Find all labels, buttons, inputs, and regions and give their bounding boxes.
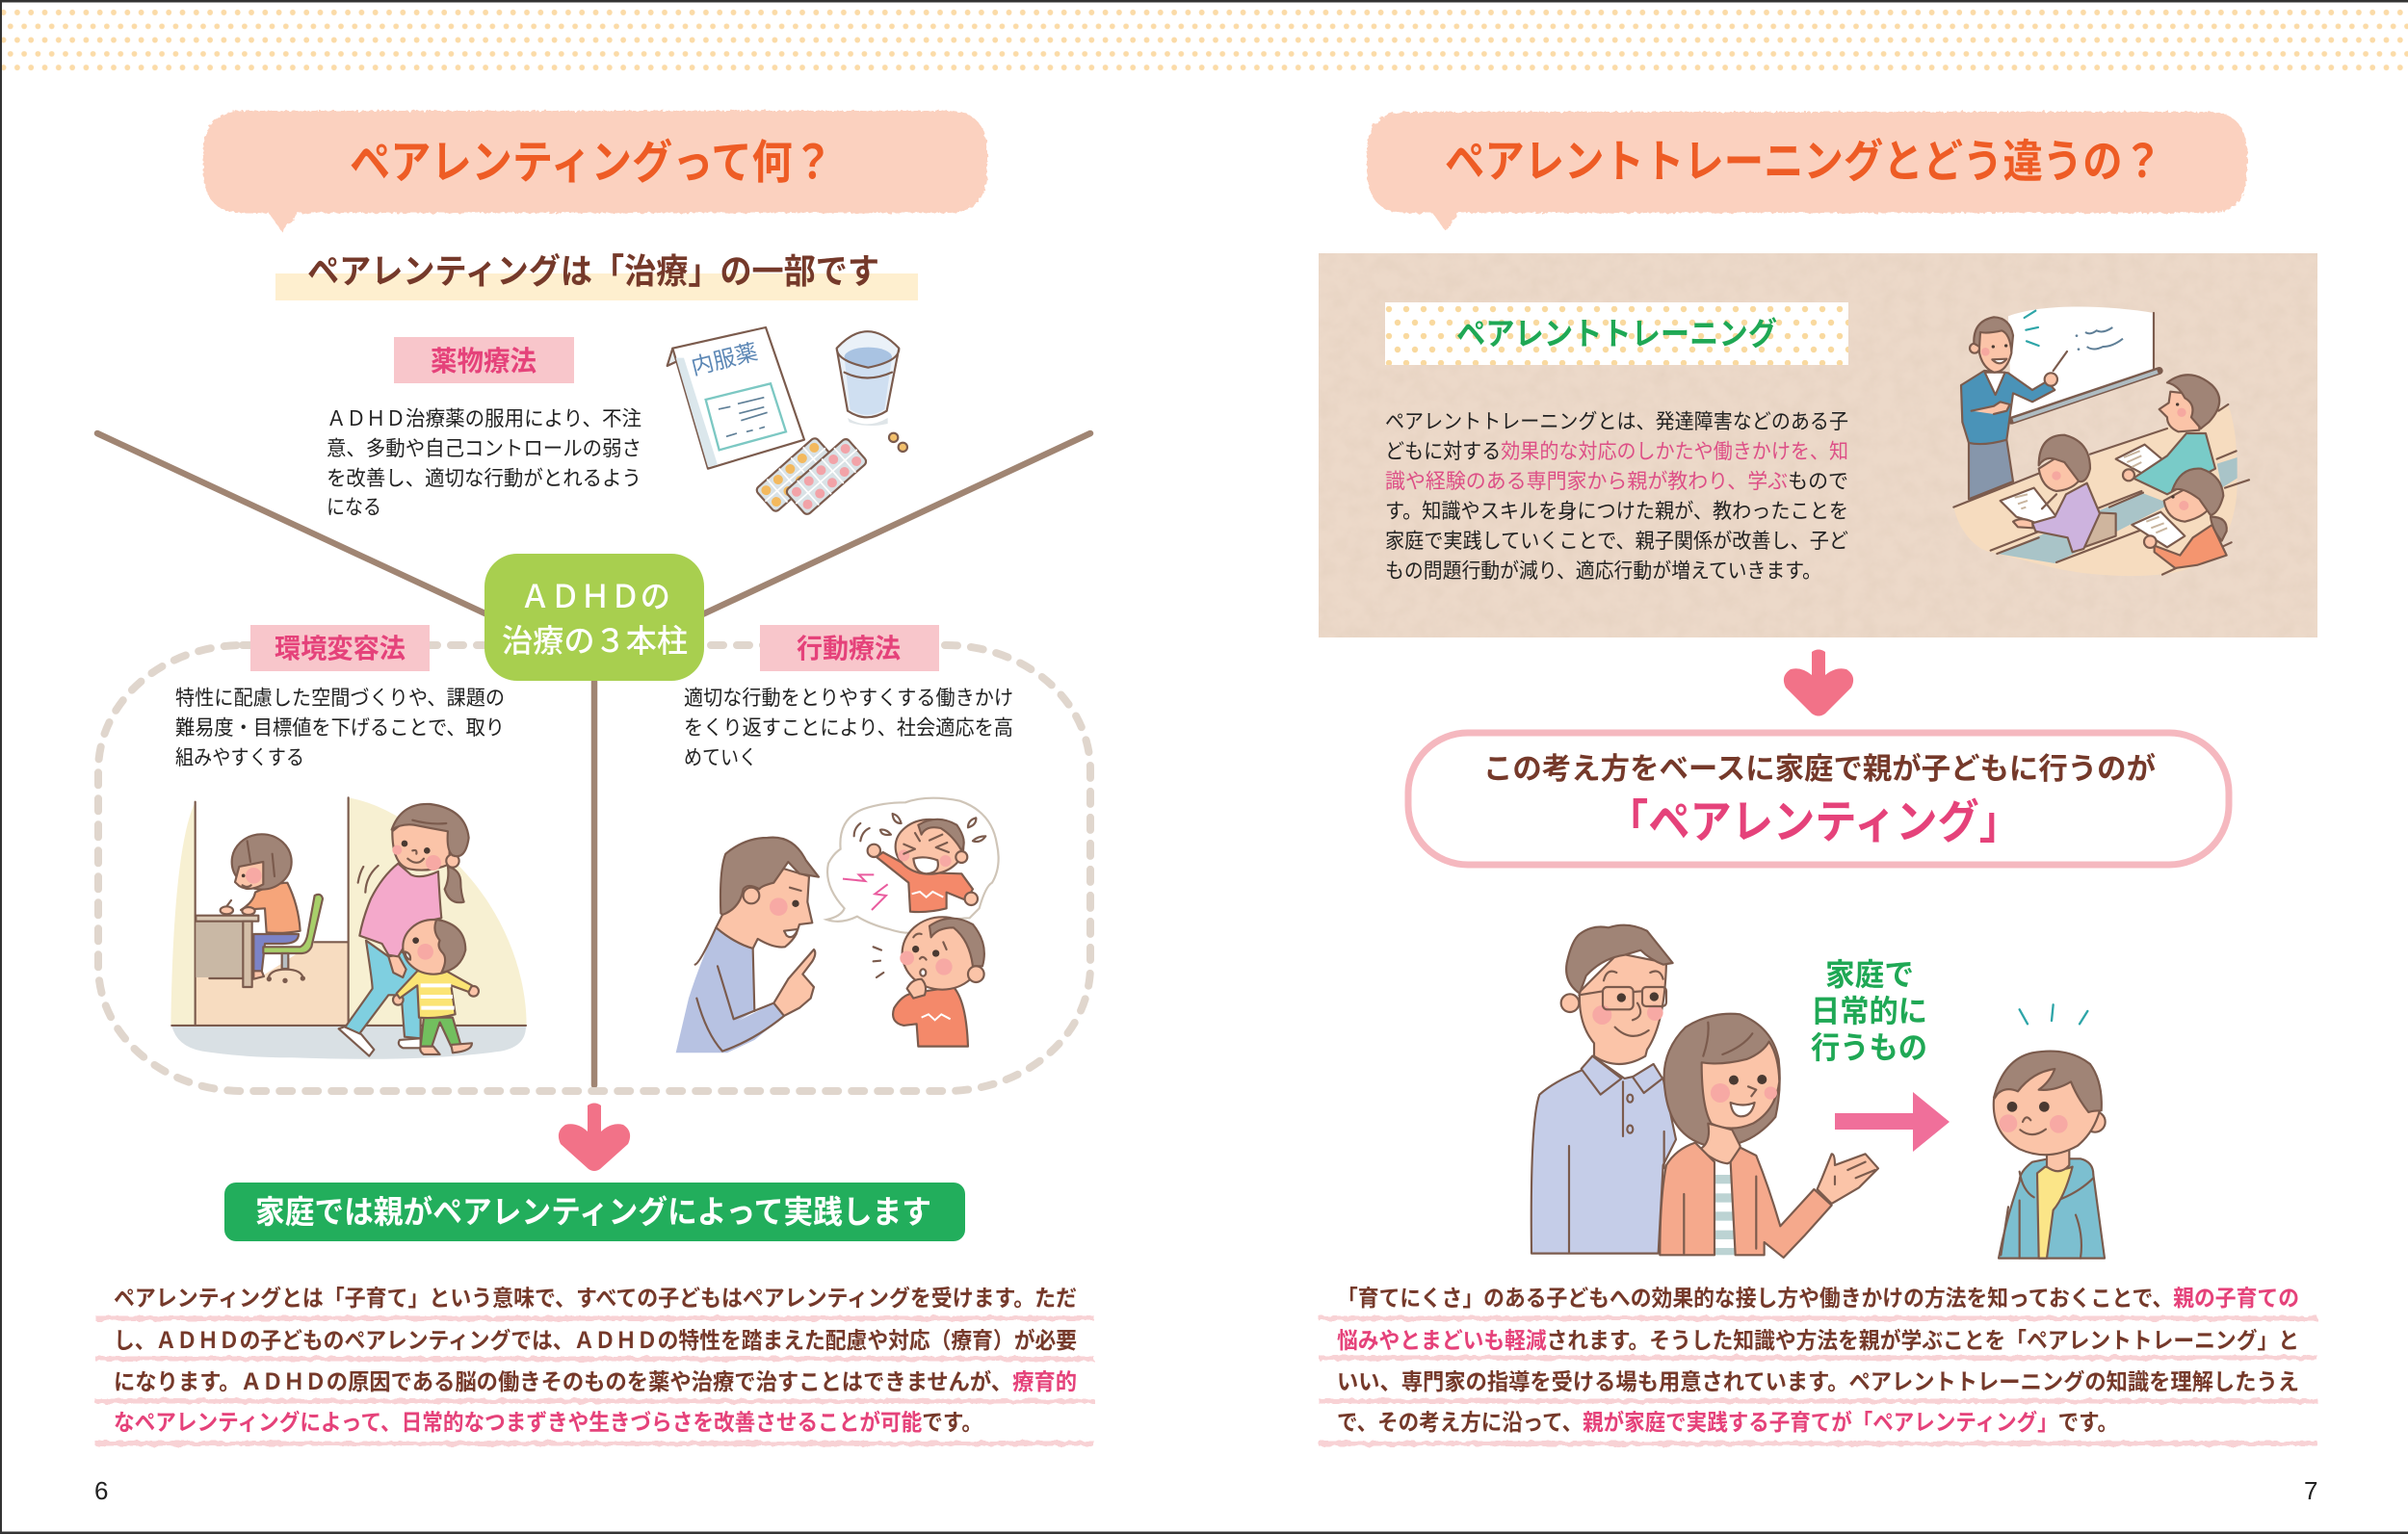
page number 6: 6 (94, 1476, 108, 1505)
illustration: child (1994, 1004, 2106, 1259)
icon: medicine bag, glass and pills: 内服薬 (689, 339, 760, 379)
paragraph: right page: いい、専門家の指導を受ける場も用意されています。ペアレントトレーニングの知識を理解したうえ (1337, 1368, 2299, 1394)
page number 7: 7 (2304, 1476, 2317, 1505)
text: behavior therapy: めていく (684, 746, 757, 769)
parent training text: す。知識やスキルを身につけた親が、教わったことを (1385, 500, 1848, 523)
paragraph: right page (1319, 1286, 2317, 1443)
illustration: classroom (1953, 307, 2249, 576)
tag: behavior therapy (760, 625, 939, 671)
center box: three pillars of ADHD treatment: 治療の３本柱 (502, 623, 688, 659)
parent training text: ペアレントトレーニングとは、発達障害などのある子 (1385, 410, 1848, 433)
paragraph: left page: になります。ＡＤＨＤの原因である脳の働きそのものを薬や治療で治すことはできませんが、療育的 (114, 1368, 1077, 1394)
text: medication therapy: を改善し、適切な行動がとれるよう (327, 467, 641, 490)
parent training text: どもに対する効果的な対応のしかたや働きかけを、知 (1385, 440, 1848, 463)
label: at home, daily: 家庭で (1825, 957, 1914, 992)
center box: three pillars of ADHD treatment (484, 554, 704, 681)
paragraph: right page: 悩みやとまどいも軽減されます。そうした知識や方法を親が学ぶことを「ペアレントトレーニング」と (1337, 1327, 2299, 1353)
text: behavior therapy: をくり返すことにより、社会適応を高 (684, 716, 1013, 740)
text: environment adjustment: 難易度・目標値を下げることで、取り (175, 716, 505, 740)
text: medication therapy: 意、多動や自己コントロールの弱さ (327, 437, 641, 460)
arrow: parent to child (1835, 1092, 1950, 1152)
text: environment adjustment (175, 687, 505, 769)
paragraph: left page: し、ＡＤＨＤの子どものペアレンティングでは、ＡＤＨＤの特性を踏まえた配慮や対応（療育）が必要 (114, 1327, 1077, 1353)
text: medication therapy: ＡＤＨＤ治療薬の服用により、不注 (327, 407, 641, 430)
green banner (224, 1183, 965, 1241)
header dot band (0, 4, 2408, 71)
parent training label: ペアレントトレーニング (1456, 316, 1777, 351)
callout: parenting: 「ペアレンティング」 (1607, 797, 2021, 848)
tag: medication therapy: 薬物療法 (431, 346, 537, 377)
panel: parent training (1319, 253, 2317, 637)
arrow: left page (559, 1104, 630, 1171)
paragraph: right page: 「育てにくさ」のある子どもへの効果的な接し方や働きかけの方法を知っておくことで、親の子育ての (1337, 1286, 2299, 1311)
heading bubble: how it differs: ペアレントトレーニングとどう違うの？ (1445, 136, 2162, 187)
label: at home, daily (1811, 957, 1927, 1065)
paragraph: right page: で、その考え方に沿って、親が家庭で実践する子育てが「ペアレンティング」です。 (1337, 1409, 2118, 1435)
callout: parenting (1408, 733, 2229, 865)
paragraph: left page: なペアレンティングによって、日常的なつまずきや生きづらさを改善させることが可能です。 (114, 1409, 982, 1435)
text: environment adjustment: 特性に配慮した空間づくりや、課題の (175, 687, 505, 710)
callout: parenting: この考え方をベースに家庭で親が子どもに行うのが (1483, 752, 2156, 786)
illustration: study room, mother and child (170, 797, 527, 1059)
text: medication therapy: になる (327, 496, 381, 519)
illustration: father giving instruction, child reacting (676, 798, 999, 1053)
text: medication therapy (327, 407, 641, 519)
dashed frame (98, 645, 1090, 1091)
parent training text: 家庭で実践していくことで、親子関係が改善し、子ど (1385, 530, 1848, 553)
tag: environment adjustment: 環境変容法 (275, 634, 406, 663)
heading bubble: what is parenting (203, 111, 987, 232)
illustration: parents (1531, 925, 1878, 1258)
subheading with highlight: ペアレンティングは「治療」の一部です (307, 251, 879, 291)
arrow: right page (1784, 649, 1853, 716)
icon: medicine bag, glass and pills (667, 327, 907, 516)
tag: medication therapy (394, 337, 574, 383)
tag: environment adjustment (250, 625, 430, 671)
heading bubble: how it differs (1367, 112, 2247, 231)
center box: three pillars of ADHD treatment: ＡＤＨＤの (520, 579, 670, 614)
label: at home, daily: 行うもの (1811, 1030, 1927, 1065)
text: environment adjustment: 組みやすくする (175, 746, 304, 769)
parent training text (1385, 410, 1848, 583)
parent training label (1385, 302, 1848, 365)
heading bubble: what is parenting: ペアレンティングって何？ (350, 138, 833, 189)
parent training text: 識や経験のある専門家から親が教わり、学ぶもので (1385, 470, 1848, 493)
green banner: 家庭では親がペアレンティングによって実践します (255, 1194, 931, 1230)
paragraph: left page (95, 1285, 1094, 1443)
label: at home, daily: 日常的に (1811, 994, 1927, 1028)
paragraph: left page: ペアレンティングとは「子育て」という意味で、すべての子どもはペアレンティングを受けます。ただ (114, 1285, 1077, 1311)
pillar lines (97, 433, 1090, 1085)
text: behavior therapy: 適切な行動をとりやすくする働きかけ (684, 687, 1013, 710)
tag: behavior therapy: 行動療法 (797, 634, 901, 663)
parent training text: もの問題行動が減り、適応行動が増えていきます。 (1385, 559, 1821, 583)
text: behavior therapy (684, 687, 1013, 769)
